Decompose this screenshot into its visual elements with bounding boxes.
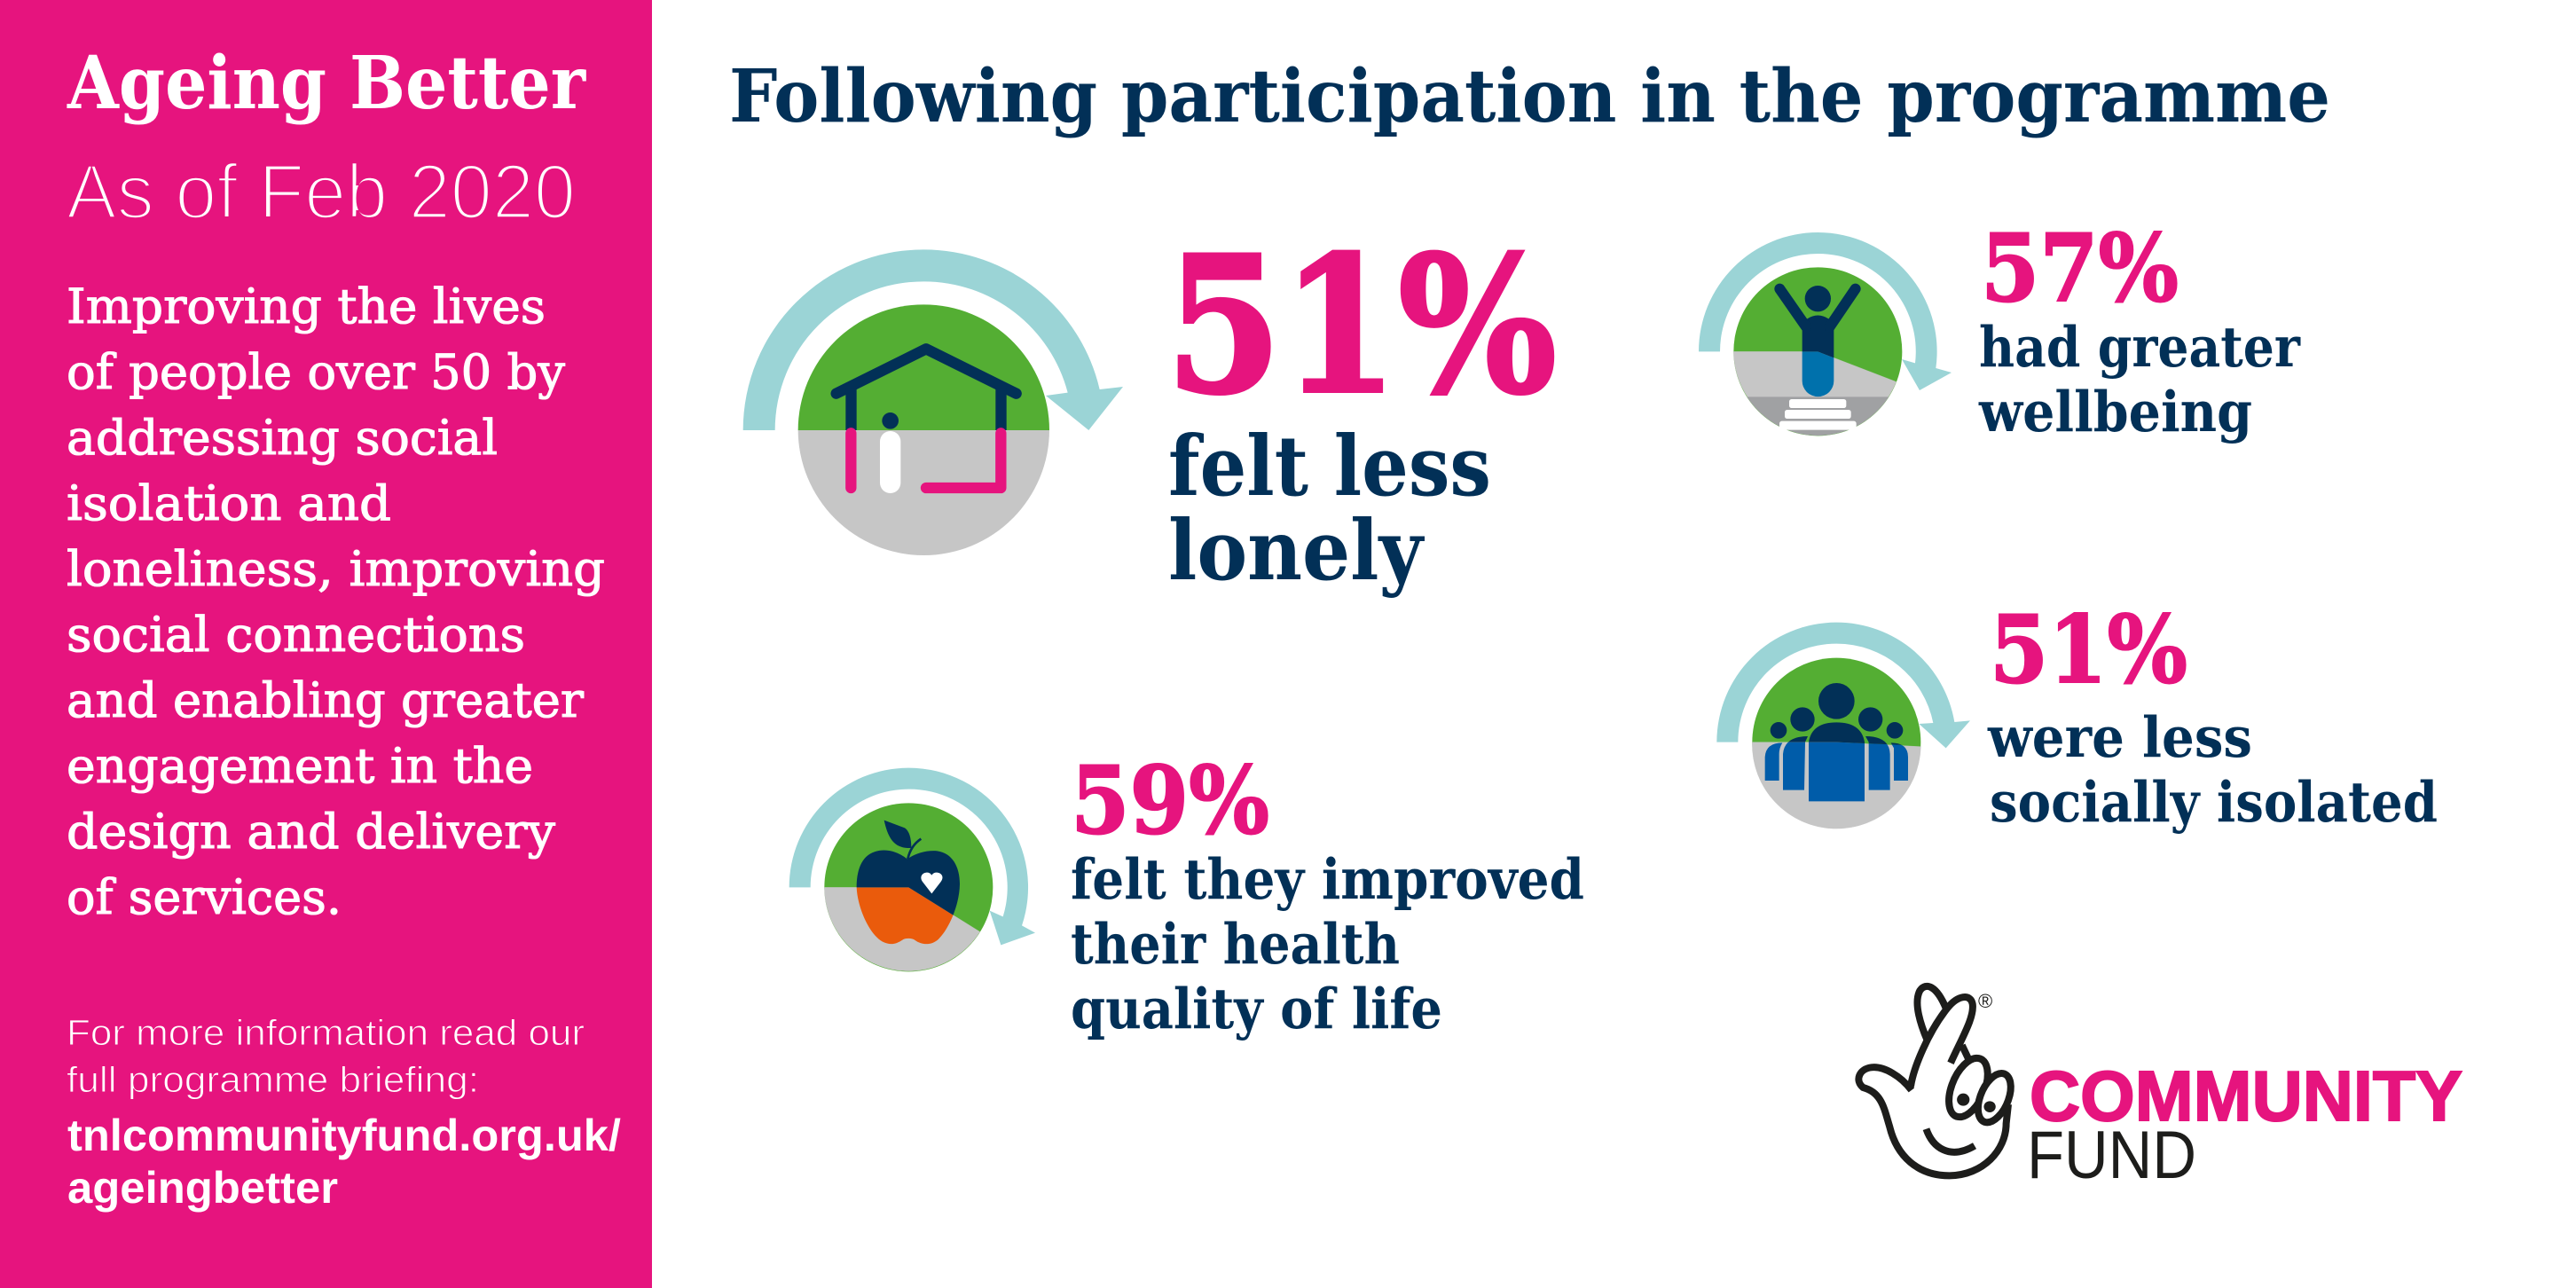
- stat: 57% had greater wellbeing: 57%: [1981, 213, 2179, 323]
- sidebar description: Improving the lives: [67, 279, 546, 334]
- panel: Ageing Better sidebar: [0, 0, 652, 1288]
- stat: 51% were less socially isolated: 51%: [1990, 594, 2187, 704]
- stat: 51% felt less lonely: [1166, 215, 1557, 600]
- sidebar description: design and delivery: [67, 804, 556, 860]
- more information text: [67, 1012, 585, 1100]
- icon: house with rising arrow: [743, 249, 1123, 555]
- stat: 59% felt they improved their health quality of life: quality of life: [1071, 976, 1442, 1041]
- sidebar description: of people over 50 by: [67, 344, 565, 400]
- sidebar description: addressing social: [67, 410, 498, 466]
- stat: 59% felt they improved their health quality of life: felt they improved: [1071, 846, 1584, 912]
- icon: apple with heart: [789, 768, 1035, 971]
- logo: Community Fund: FUND: [2027, 1118, 2196, 1193]
- sidebar description: loneliness, improving: [67, 541, 605, 597]
- stat: 51% felt less lonely: felt less: [1168, 418, 1491, 515]
- title: Following participation in the programme: [729, 54, 2330, 139]
- sidebar description: engagement in the: [67, 738, 533, 794]
- stat: 51% were less socially isolated: were less: [1987, 704, 2252, 770]
- stat: 59% felt they improved their health quality of life: their health: [1071, 911, 1400, 977]
- more information text: full programme briefing:: [67, 1059, 479, 1100]
- logo: Community Fund: COMMUNITY: [2030, 1056, 2462, 1135]
- sidebar date: As of Feb 2020: [67, 149, 576, 235]
- stat: 59% felt they improved their health quality of life: 59%: [1071, 745, 1269, 855]
- sidebar heading: Ageing Better: [67, 41, 587, 126]
- stat: 51% felt less lonely: 51%: [1166, 215, 1557, 436]
- website link: ageingbetter: [67, 1163, 338, 1213]
- icon: crossed fingers hand: [1858, 986, 2017, 1175]
- sidebar description: and enabling greater: [67, 672, 584, 728]
- website link: [67, 1111, 621, 1213]
- stat: 57% had greater wellbeing: had greater: [1979, 314, 2301, 380]
- logo: Community Fund: ®: [1978, 990, 1992, 1012]
- stat: 51% were less socially isolated: socially isolated: [1990, 769, 2438, 835]
- sidebar description: isolation and: [67, 475, 391, 531]
- sidebar description: of services.: [67, 869, 342, 925]
- icon: person with raised arms: [1699, 232, 1952, 436]
- website link: tnlcommunityfund.org.uk/: [67, 1111, 621, 1160]
- stat: 57% had greater wellbeing: wellbeing: [1978, 379, 2252, 444]
- stat: 51% felt less lonely: lonely: [1168, 502, 1425, 600]
- logo: Community Fund: [1858, 986, 2462, 1193]
- sidebar description: social connections: [67, 607, 525, 663]
- stat: 57% had greater wellbeing: [1978, 213, 2301, 444]
- stat: 51% were less socially isolated: [1987, 594, 2438, 835]
- sidebar description: [67, 279, 605, 925]
- stat: 59% felt they improved their health quality of life: [1071, 745, 1584, 1041]
- more information text: For more information read our: [67, 1012, 585, 1053]
- icon: group of people: [1716, 623, 1970, 829]
